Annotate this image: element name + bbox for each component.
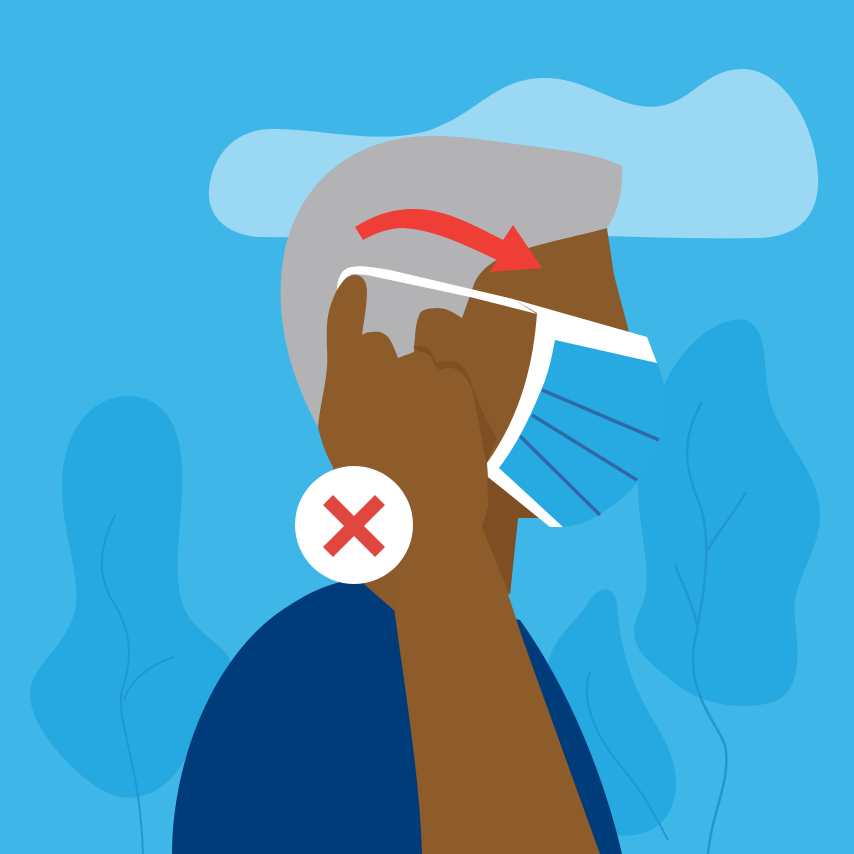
mask xyxy=(337,266,665,527)
warning badge xyxy=(295,466,413,584)
neck shadow xyxy=(482,478,545,595)
mask fabric xyxy=(499,340,665,527)
head and neck xyxy=(318,228,640,620)
mask pleats xyxy=(520,390,659,515)
red arrow xyxy=(355,209,542,272)
arm and hand xyxy=(318,275,600,854)
hair xyxy=(281,136,622,427)
shirt xyxy=(172,580,622,854)
red cross xyxy=(323,495,385,557)
finger shadow xyxy=(413,346,497,462)
leaf: right plant xyxy=(634,319,820,854)
cloud xyxy=(209,69,818,238)
mask strap xyxy=(337,266,537,314)
mask frame xyxy=(487,299,657,527)
leaf: left plant xyxy=(30,396,232,854)
leaf: centre plant xyxy=(548,589,676,840)
